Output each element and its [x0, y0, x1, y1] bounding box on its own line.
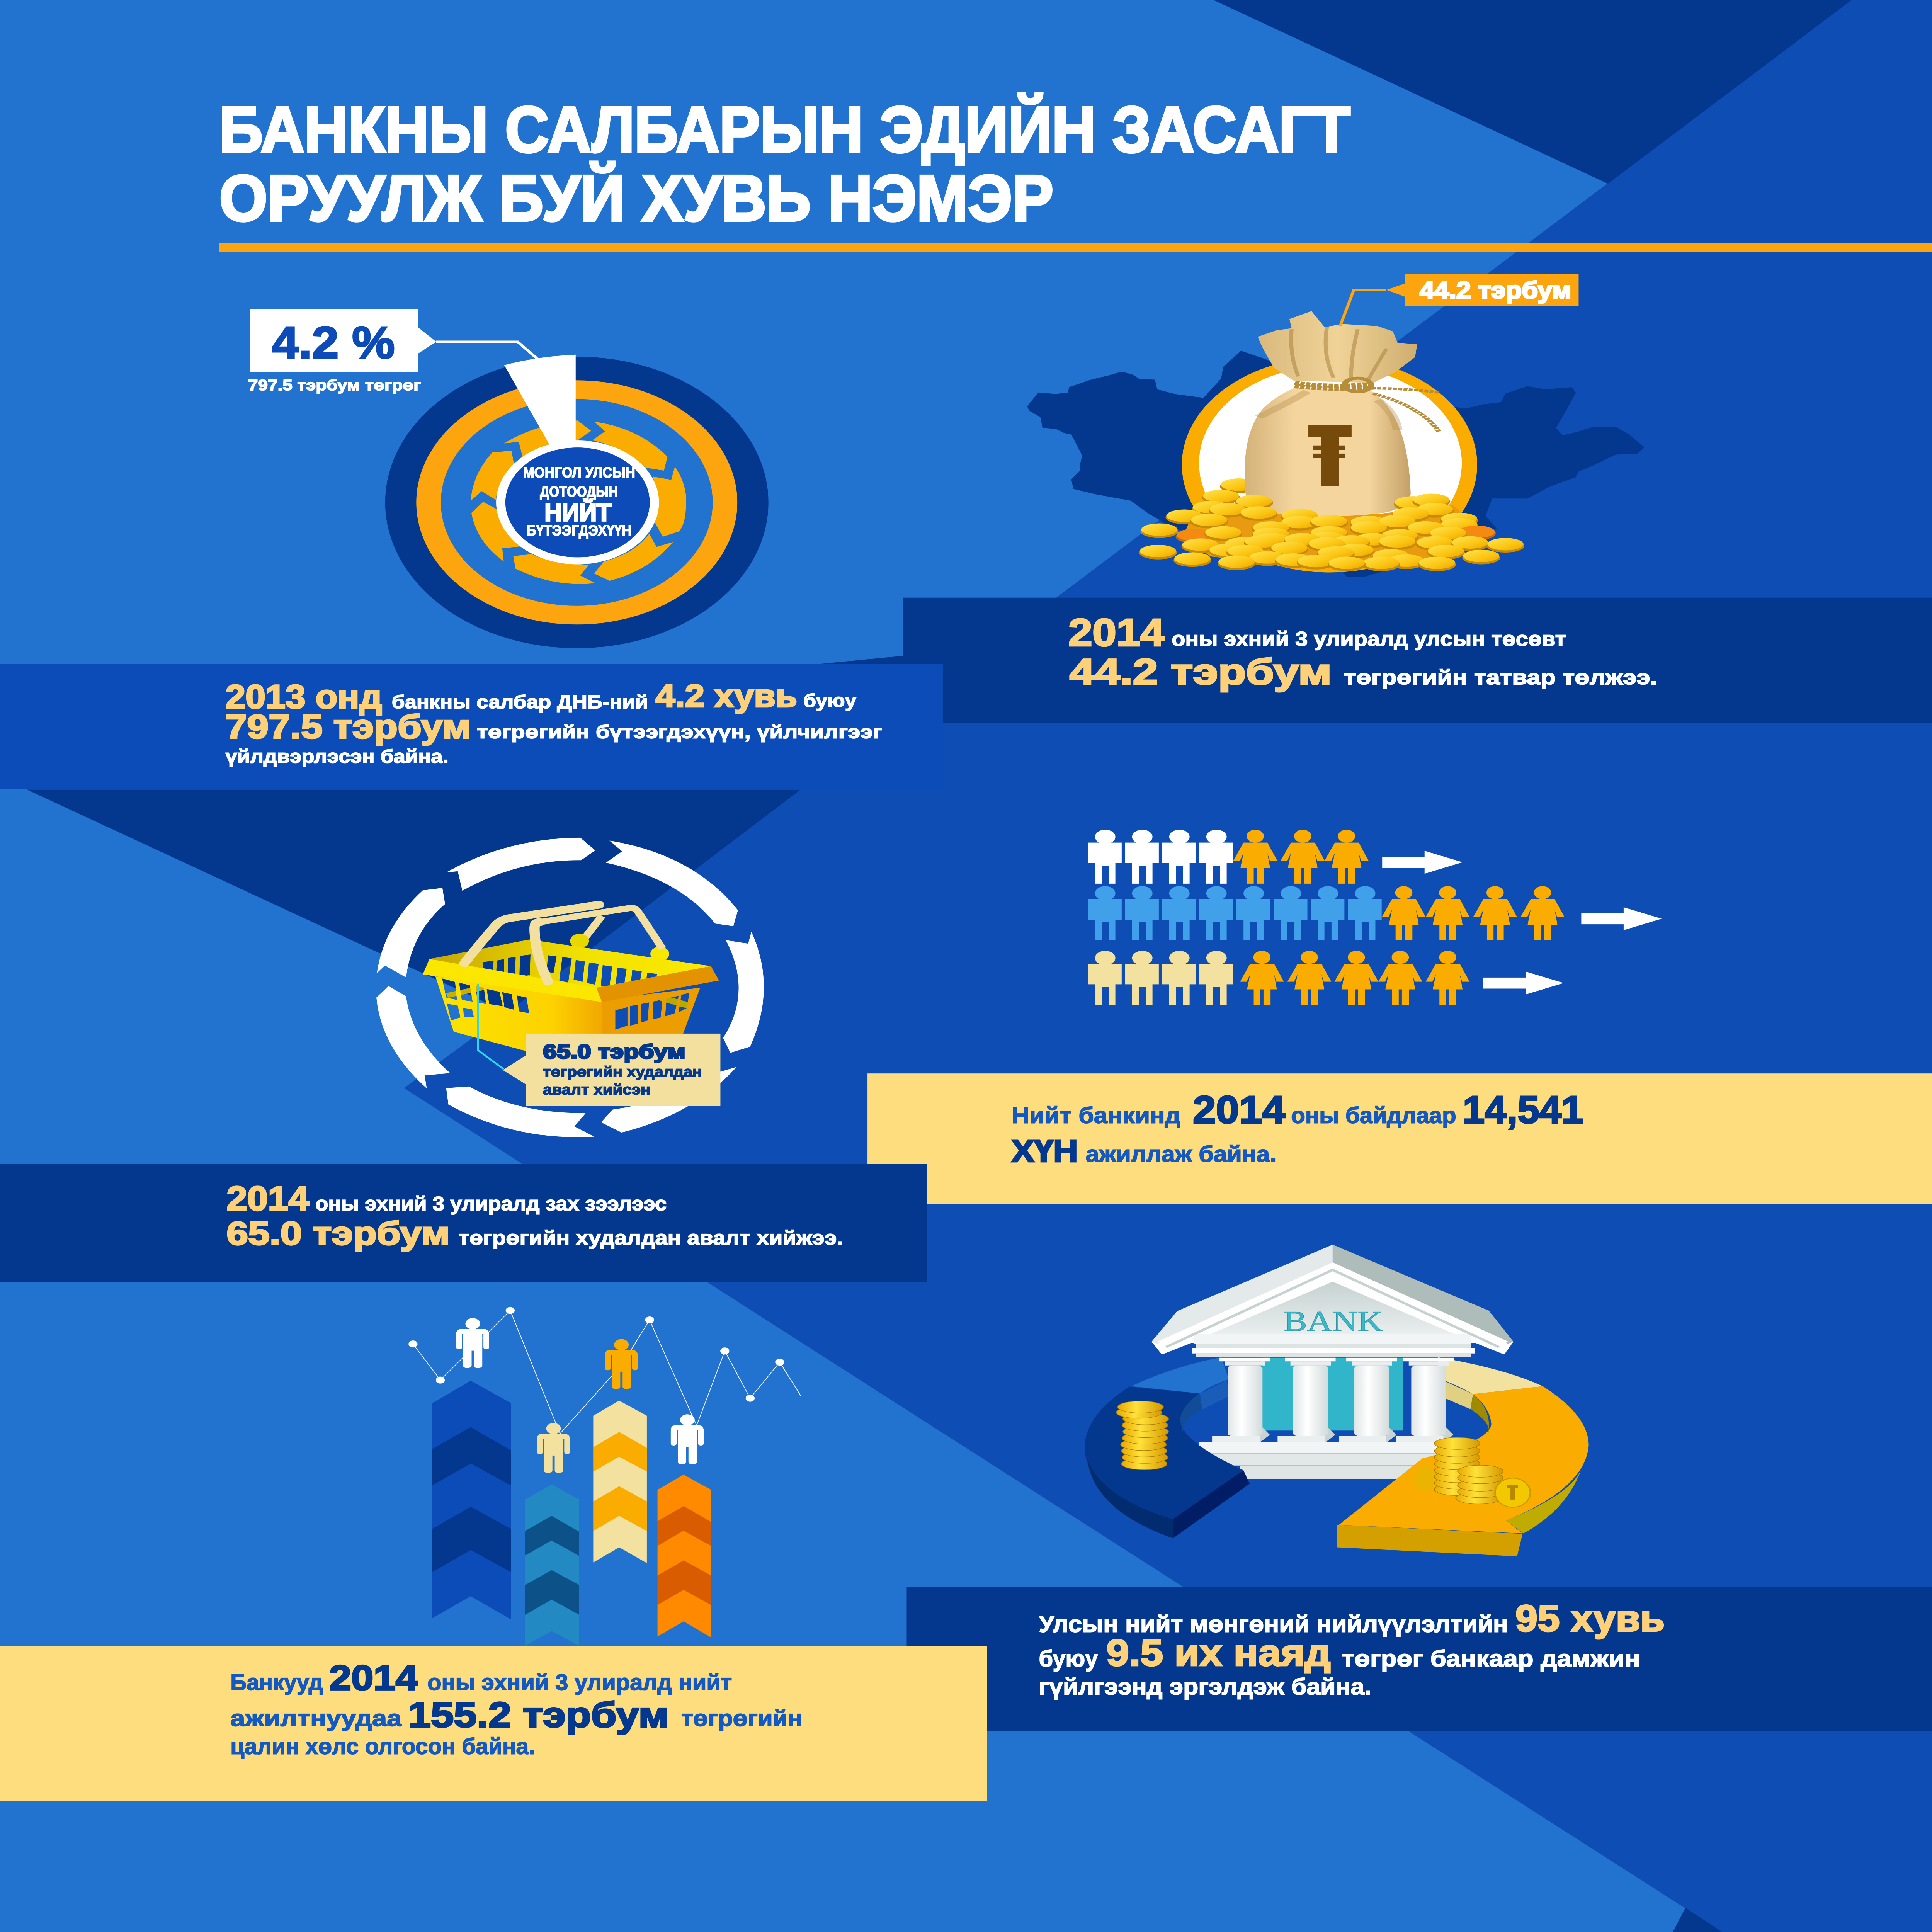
callout caption: 797.5 тэрбум төгрөг: [248, 377, 421, 394]
arrow column teal: [525, 1485, 579, 1646]
panel: money circulation text: [906, 1587, 1932, 1731]
panel: retail purchase text: [0, 1164, 927, 1282]
arrow three: [1483, 971, 1564, 995]
basket callout text: 65.0 тэрбум: [543, 1041, 685, 1063]
panel: employees text: ажиллаж байна.: [1086, 1141, 1277, 1167]
panel: retail purchase text: 65.0 тэрбум: [226, 1215, 450, 1252]
panel: money circulation text: төгрөг банкаар дамжин: [1342, 1645, 1640, 1672]
panel: GDP text: төгрөгийн бүтээгдэхүүн, үйлчилгээг: [477, 721, 882, 742]
centre text: МОНГОЛ УЛСЫН: [523, 464, 635, 481]
panel: wages text: [0, 1646, 987, 1801]
panel: wages text: цалин хөлс олгосон байна.: [230, 1733, 535, 1759]
panel: GDP text: 2013 онд: [225, 678, 382, 716]
panel: wages chart: [408, 1307, 801, 1646]
row one: [1088, 830, 1369, 884]
arrow column orange: [658, 1475, 711, 1638]
callout: 4.2 percent: [250, 309, 436, 372]
person icons: [456, 1318, 704, 1473]
bag callout tag: [1386, 274, 1578, 306]
line chart: [408, 1307, 801, 1434]
columns: [1212, 1358, 1454, 1442]
panel: tax text: оны эхний 3 улиралд улсын төсөвт: [1172, 628, 1566, 650]
panel: retail purchase text: 2014: [226, 1180, 309, 1218]
panel: tax text: 2014: [1068, 611, 1164, 654]
panel: employees text: Нийт банкинд: [1012, 1102, 1180, 1128]
panel: retail purchase text: оны эхний 3 улиралд зах зээлээс: [315, 1193, 667, 1215]
callout box: [503, 1034, 720, 1106]
arrow ring: [376, 838, 764, 1137]
ring blue segment: [1085, 1387, 1250, 1538]
bag callout connector: [1340, 290, 1386, 326]
roof underside: [1151, 1264, 1514, 1354]
panel: GDP share donut: [248, 309, 769, 648]
title: БАНКНЫ САЛБАРЫН ЭДИЙН ЗАСАГТ: [219, 93, 1350, 166]
entablature: [1194, 1334, 1471, 1344]
panel: money circulation text: буюу: [1039, 1645, 1098, 1672]
panel: employees text: оны байдлаар: [1291, 1102, 1456, 1128]
arrow two: [1581, 907, 1662, 930]
steps: [1199, 1442, 1453, 1454]
panel: wages text: Банкууд: [230, 1669, 323, 1695]
panel: GDP text: банкны салбар ДНБ-ний: [392, 691, 648, 713]
panel: GDP text: үйлдвэрлэсэн байна.: [225, 746, 449, 767]
bag callout text: 44.2 тэрбум: [1420, 277, 1571, 303]
panel: GDP text: буюу: [803, 690, 857, 711]
callout: 4.2 percent: 4.2 %: [272, 317, 395, 368]
panel: wages text: 155.2 тэрбум: [408, 1695, 669, 1735]
connector line: [436, 342, 537, 359]
panel: employees text: 14,541: [1463, 1088, 1583, 1132]
tugrik sign: [1308, 425, 1352, 486]
panel: employees pictogram: [1088, 830, 1662, 1005]
circular arrows: [471, 420, 686, 584]
panel: employees text: ХҮН: [1012, 1134, 1078, 1168]
panel: shopping basket: [376, 838, 764, 1137]
coins: [1139, 490, 1524, 571]
centre text: [523, 464, 635, 539]
coin stack left: [1116, 1401, 1168, 1470]
ring back segments: [1131, 1357, 1543, 1410]
pediment: [1210, 1282, 1455, 1334]
arrow one: [1382, 851, 1463, 874]
panel: money circulation text: 9.5 их наяд: [1106, 1632, 1331, 1674]
centre text: НИЙТ: [544, 498, 611, 526]
panel: tax text: төгрөгийн татвар төлжээ.: [1344, 666, 1657, 689]
panel: retail purchase text: төгрөгийн худалдан авалт хийжээ.: [459, 1227, 843, 1249]
panel: tax text: [903, 598, 1932, 723]
row three: [1088, 951, 1469, 1005]
panel: employees text: [867, 1073, 1932, 1204]
temple: [1151, 1245, 1514, 1479]
row two: [1088, 886, 1565, 940]
panel: wages text: оны эхний 3 улиралд нийт: [427, 1669, 732, 1695]
rope: [1295, 378, 1439, 432]
title: [219, 93, 1350, 235]
centre text: ДОТООДЫН: [540, 483, 618, 500]
basket callout text: [543, 1041, 702, 1098]
white wedge 4.2 percent: [504, 355, 576, 446]
panel: wages text: ажилтнуудаа: [230, 1705, 402, 1731]
panel: tax money bag: [1027, 274, 1644, 577]
title: ОРУУЛЖ БУЙ ХУВЬ НЭМЭР: [219, 162, 1053, 235]
roof: [1151, 1245, 1333, 1344]
arrow column cream: [593, 1401, 647, 1563]
panel: GDP text: [0, 664, 943, 789]
panel: money circulation text: гүйлгээнд эргэлдэж байна.: [1039, 1673, 1371, 1699]
callout connector: [478, 984, 503, 1069]
panel: GDP text: 797.5 тэрбум: [225, 708, 471, 745]
ring orange arrow: [1337, 1386, 1589, 1556]
panel: wages text: төгрөгийн: [681, 1705, 802, 1731]
panel: employees text: 2014: [1193, 1088, 1285, 1132]
basket: [423, 905, 719, 1051]
panel: bank building: [1085, 1245, 1589, 1556]
panel: money circulation text: Улсын нийт мөнгөний нийлүүлэлтийн: [1039, 1611, 1508, 1637]
map of Mongolia: [1027, 351, 1644, 577]
panel: wages text: 2014: [329, 1658, 418, 1698]
centre text: БҮТЭЭГДЭХҮҮН: [527, 522, 632, 539]
basket callout text: төгрөгийн худалдан: [543, 1063, 702, 1080]
bag: [1245, 311, 1439, 516]
panel: money circulation text: 95 хувь: [1515, 1597, 1665, 1639]
coin stacks right: [1414, 1437, 1530, 1507]
oval frame: [1182, 357, 1477, 573]
centre circle: [496, 440, 659, 565]
donut rings: [385, 357, 769, 648]
bank sign: BANK: [1284, 1306, 1383, 1337]
coin pile behind bag: [1184, 478, 1483, 565]
panel: GDP text: 4.2 хувь: [655, 678, 797, 714]
basket callout text: авалт хийсэн: [543, 1082, 651, 1098]
panel: tax text: 44.2 тэрбум: [1070, 652, 1332, 692]
arrow column blue: [432, 1381, 511, 1619]
